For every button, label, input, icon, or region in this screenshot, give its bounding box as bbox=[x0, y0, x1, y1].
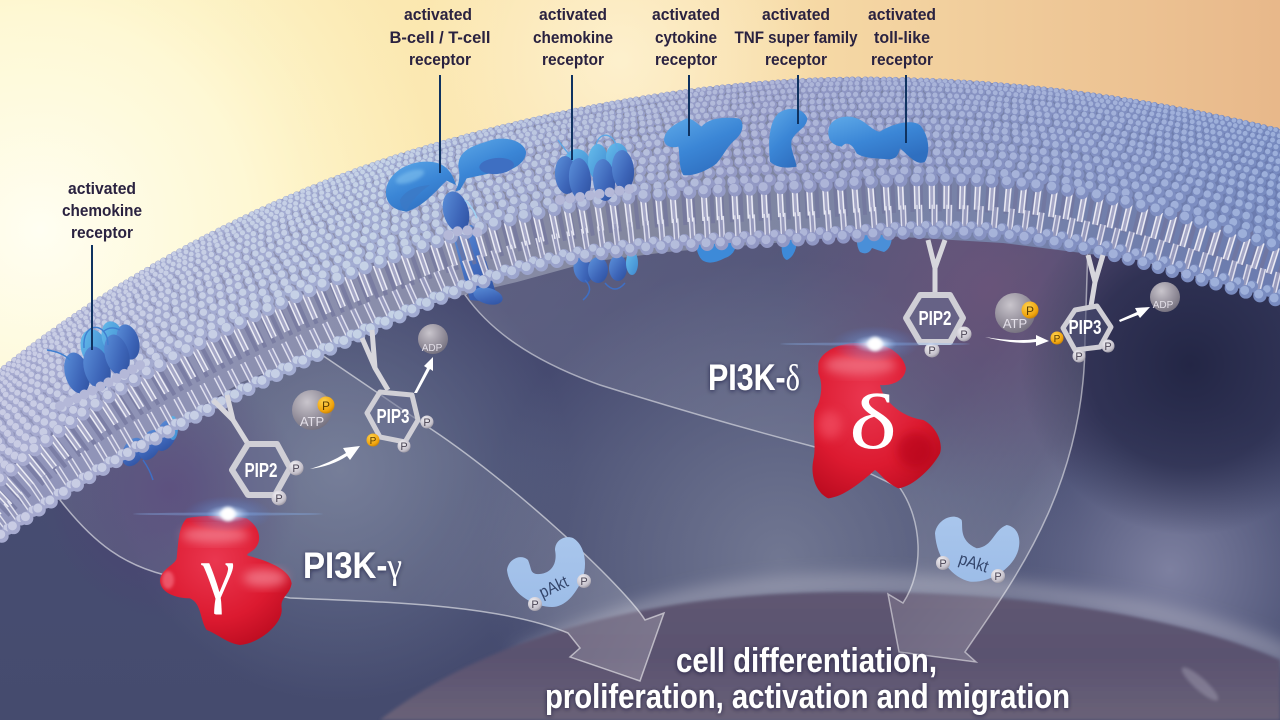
molecule group: PIP3 (delta side): P bbox=[1104, 341, 1112, 353]
label: chemokine receptor top: receptor bbox=[542, 50, 604, 69]
molecule group: PIP3 (gamma side) bbox=[362, 330, 434, 453]
molecule: ADP (delta side) bbox=[1150, 282, 1180, 312]
leader lines from labels to receptors bbox=[92, 75, 906, 350]
molecule group: PIP2 (gamma side): PIP2 bbox=[244, 460, 278, 482]
molecule group: PIP2 (gamma side) bbox=[213, 395, 304, 506]
molecule group: PIP2 (gamma side): P bbox=[292, 463, 300, 475]
molecule group: PIP2 (delta side): P bbox=[928, 345, 936, 357]
label: B-cell T-cell receptor: B-cell / T-cell bbox=[390, 28, 490, 47]
molecule: ATP (gamma side): P bbox=[322, 399, 330, 413]
glass arrow: PI3K-gamma pathway to cell response bbox=[60, 340, 664, 681]
molecule group: PIP3 (delta side) bbox=[1050, 255, 1114, 363]
receptor: chemokine receptor (centre) bbox=[553, 135, 636, 202]
molecule: pAkt (delta side) bbox=[935, 517, 1019, 583]
delta symbol: δ bbox=[849, 378, 897, 465]
molecule group: PIP2 (gamma side): P bbox=[275, 493, 283, 505]
molecule group: PIP2 (delta side): P bbox=[960, 329, 968, 341]
outcome text bbox=[545, 642, 1070, 716]
molecule: pAkt (delta side): P bbox=[994, 571, 1002, 583]
molecule: ADP (gamma side): ADP bbox=[422, 343, 443, 354]
label: toll-like receptor: receptor bbox=[871, 50, 933, 69]
receptor labels bbox=[62, 5, 936, 242]
molecule: ADP (delta side): ADP bbox=[1153, 300, 1174, 311]
protein: PI3K-delta bbox=[812, 343, 941, 498]
membrane surface base bbox=[0, 78, 1280, 545]
nucleus surface bbox=[380, 584, 1280, 720]
receptor: B-cell / T-cell receptor bbox=[386, 139, 526, 235]
molecule group: PIP2 (delta side): PIP2 bbox=[918, 308, 952, 330]
receptor parts inside the membrane bbox=[118, 225, 892, 480]
label: toll-like receptor: activated bbox=[868, 5, 936, 24]
label: B-cell T-cell receptor: receptor bbox=[409, 50, 471, 69]
label: PI3K-delta: PI3K-δ bbox=[708, 357, 800, 399]
label: TNF super family receptor: receptor bbox=[765, 50, 827, 69]
label: toll-like receptor: toll-like bbox=[874, 28, 930, 47]
gamma symbol: γ bbox=[200, 531, 235, 615]
label: PI3K-gamma: PI3K-γ bbox=[303, 545, 402, 587]
lipid bilayer membrane bbox=[0, 78, 1280, 545]
label: chemokine receptor top: activated bbox=[539, 5, 607, 24]
arrow: PIP3 to ADP (delta side) bbox=[1119, 307, 1150, 322]
lipid tails bbox=[0, 193, 1280, 531]
molecule: ATP (delta side): P bbox=[1026, 304, 1034, 318]
receptor: toll-like receptor bbox=[828, 117, 928, 163]
label: TNF super family receptor: activated bbox=[762, 5, 830, 24]
molecule: ADP (gamma side) bbox=[418, 324, 448, 354]
outcome text: proliferation, activation and migration bbox=[545, 678, 1070, 716]
molecule group: PIP3 (gamma side): P bbox=[370, 436, 377, 447]
label: cytokine receptor: activated bbox=[652, 5, 720, 24]
molecule: pAkt (delta side): pAkt bbox=[956, 549, 991, 577]
outcome text: cell differentiation, bbox=[676, 642, 937, 680]
label: chemokine receptor left: receptor bbox=[71, 223, 133, 242]
molecule group: PIP3 (gamma side): P bbox=[400, 441, 408, 453]
arrow: PIP3 to ADP (gamma side) bbox=[414, 357, 433, 393]
molecule: pAkt (gamma side): P bbox=[531, 599, 539, 611]
receptor: cytokine receptor bbox=[664, 118, 742, 175]
molecule: ATP (gamma side): ATP bbox=[300, 414, 324, 429]
glass arrow: PI3K-delta pathway to cell response bbox=[465, 180, 1090, 662]
receptor: TNF super family receptor bbox=[769, 109, 807, 168]
label: TNF super family receptor: TNF super family bbox=[734, 28, 858, 47]
label: cytokine receptor: receptor bbox=[655, 50, 717, 69]
molecule: ATP (delta side) bbox=[995, 293, 1038, 333]
label: chemokine receptor top: chemokine bbox=[533, 28, 613, 47]
light flares at the active sites bbox=[133, 326, 970, 532]
arrow: PIP2 to PIP3 (gamma side) bbox=[310, 446, 360, 469]
protein: PI3K-gamma bbox=[160, 516, 292, 645]
label: chemokine receptor left: activated bbox=[68, 179, 136, 198]
molecule group: PIP3 (delta side): P bbox=[1075, 351, 1083, 363]
molecule group: PIP3 (delta side): PIP3 bbox=[1068, 317, 1102, 339]
molecule: ATP (delta side): ATP bbox=[1003, 316, 1027, 331]
label: B-cell T-cell receptor: activated bbox=[404, 5, 472, 24]
receptor: chemokine receptor (left) bbox=[47, 319, 143, 406]
molecule group: PIP2 (delta side) bbox=[906, 240, 972, 358]
molecule: pAkt (gamma side) bbox=[507, 537, 591, 611]
molecule group: PIP3 (delta side): P bbox=[1054, 334, 1061, 345]
molecule: pAkt (gamma side): P bbox=[580, 576, 588, 588]
molecule: pAkt (gamma side): pAkt bbox=[536, 572, 571, 602]
molecule: ATP (gamma side) bbox=[292, 390, 334, 430]
label: chemokine receptor left: chemokine bbox=[62, 201, 142, 220]
label: cytokine receptor: cytokine bbox=[655, 28, 717, 47]
molecule: pAkt (delta side): P bbox=[939, 558, 947, 570]
arrow: PIP2 to PIP3 (delta side) bbox=[985, 335, 1049, 346]
molecule group: PIP3 (gamma side): PIP3 bbox=[376, 406, 410, 428]
lipid head groups: top surface rows bbox=[0, 79, 1280, 545]
molecule group: PIP3 (gamma side): P bbox=[423, 417, 431, 429]
